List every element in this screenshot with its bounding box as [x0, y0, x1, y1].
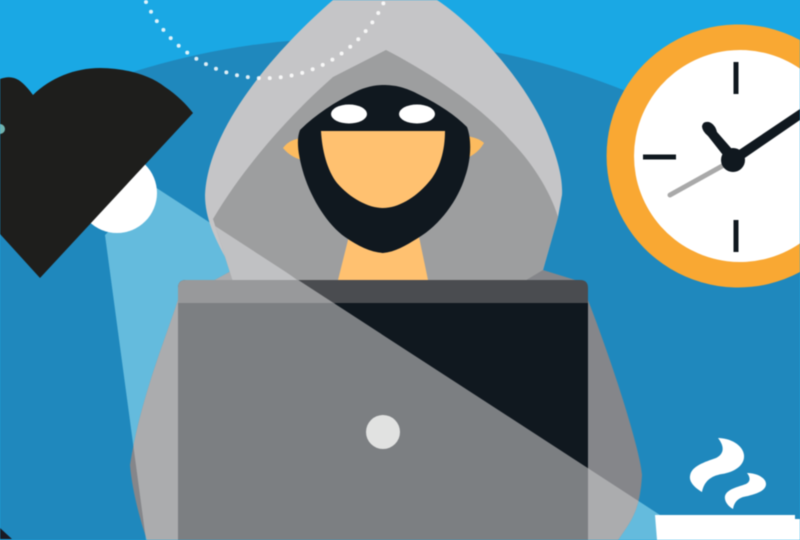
cup body: [655, 515, 800, 540]
right ear: [466, 136, 484, 158]
balaclava and beard: [298, 85, 470, 253]
laptop lid top bar: [178, 280, 588, 304]
neck: [338, 232, 428, 280]
desk lamp: [0, 68, 193, 278]
lamp light beam: [105, 187, 670, 540]
lit inner hood: [216, 226, 296, 280]
laptop logo dot: [366, 415, 400, 449]
steam small: [725, 473, 766, 509]
face: [321, 131, 445, 208]
clock ticks: [643, 62, 736, 252]
lit top bar: [178, 280, 334, 304]
left ear: [283, 138, 302, 160]
inner hood: [213, 50, 558, 282]
body: [130, 270, 642, 540]
lit body: [130, 270, 642, 540]
laptop: [178, 280, 588, 540]
hour hand: [702, 122, 738, 164]
lamp shade: [0, 68, 193, 278]
dotted arc: [146, 2, 384, 78]
hooded figure: [130, 0, 642, 540]
coffee cup: [655, 438, 800, 540]
lamp bulb: [77, 153, 157, 233]
clock face: [634, 50, 800, 262]
lit screen: [178, 303, 588, 540]
minute hand: [730, 109, 800, 164]
dark corner shape: [0, 528, 12, 539]
second hand: [670, 165, 724, 195]
lamp teal dot: [0, 124, 5, 134]
clock centre: [721, 148, 745, 172]
steam large: [690, 438, 744, 492]
clock: [607, 24, 800, 287]
left eye: [331, 104, 367, 124]
outer hood: [205, 0, 562, 272]
laptop screen: [178, 303, 588, 540]
clock ring: [607, 24, 800, 287]
right eye: [399, 104, 435, 124]
